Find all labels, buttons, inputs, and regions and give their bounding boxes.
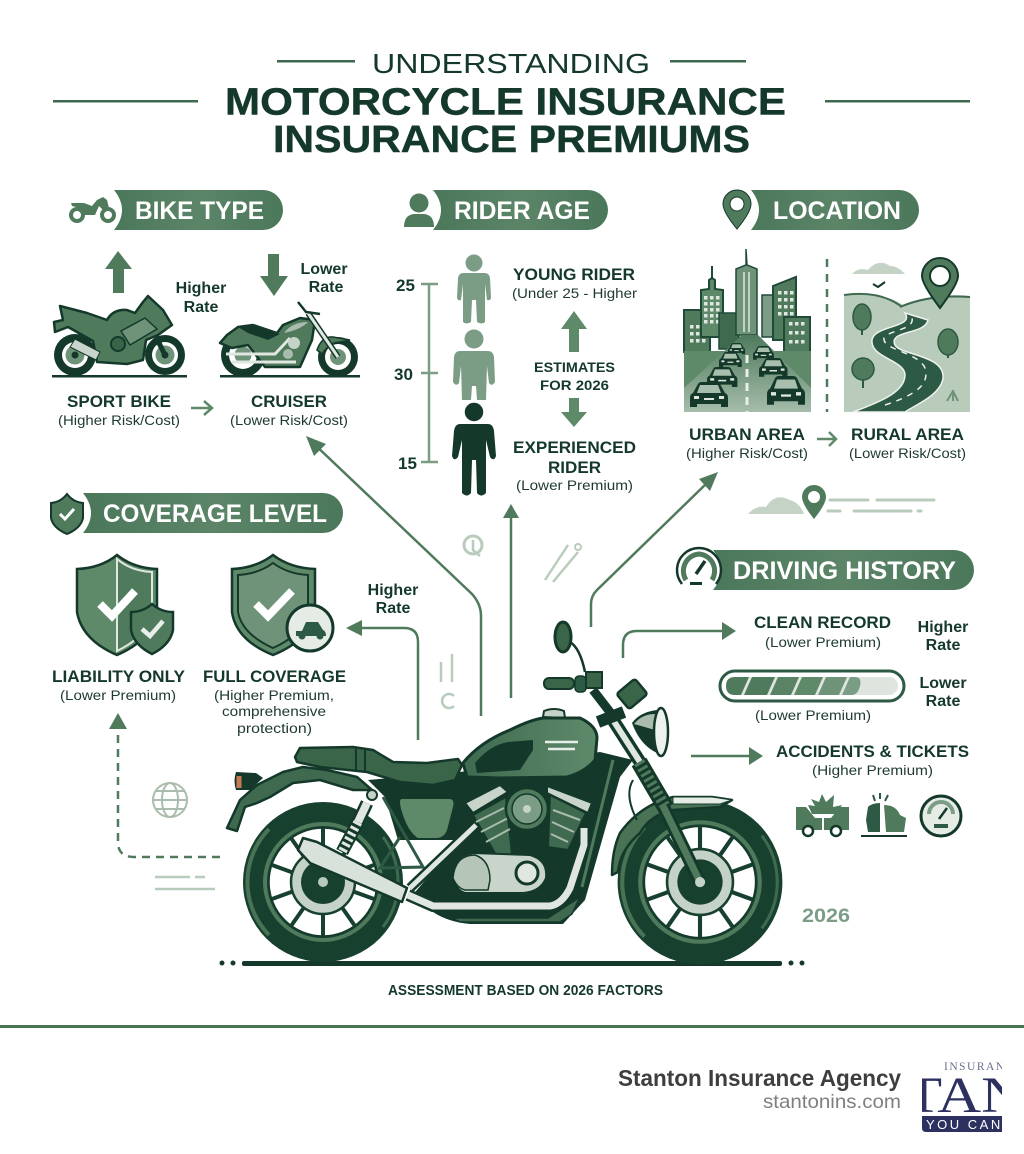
progress bar [720, 671, 904, 701]
front fork [598, 712, 705, 887]
icon: sport bike [52, 296, 187, 378]
decorative small marks [155, 536, 581, 889]
label: liability only: (Lower Premium) [60, 687, 176, 703]
panel: bike type [52, 190, 360, 428]
footer: logo: INSURANCE [944, 1061, 1023, 1073]
engine [453, 785, 592, 893]
label: clean record: CLEAN RECORD [754, 613, 891, 632]
headlight [632, 708, 668, 756]
label: sport bike: (Higher Risk/Cost) [58, 412, 180, 428]
panel: coverage level [51, 493, 418, 736]
heading: driving history [713, 550, 974, 590]
rear shock [342, 790, 377, 852]
heading: coverage level [83, 493, 343, 533]
label: higher rate: Higher [176, 280, 226, 297]
icon: small shield [51, 494, 83, 534]
title [53, 48, 970, 161]
brake cable [629, 780, 637, 820]
label: cruiser: (Lower Risk/Cost) [230, 412, 348, 428]
icon: speedometer [677, 548, 721, 585]
icon: map pin [723, 190, 751, 229]
label: clean record: (Lower Premium) [765, 634, 881, 650]
label: sport bike [58, 392, 180, 428]
footer: logo: TAN [905, 1068, 1024, 1124]
frame [368, 752, 633, 924]
icon: globe [153, 783, 187, 817]
label: lower rate: Lower [300, 261, 348, 278]
label: full coverage [203, 667, 346, 736]
frame rail [582, 760, 613, 887]
label: cruiser: CRUISER [251, 392, 327, 411]
age scale: 25 [396, 276, 415, 295]
label: young rider [512, 265, 637, 301]
title: INSURANCE PREMIUMS [273, 119, 750, 161]
label: liability only: LIABILITY ONLY [52, 667, 186, 686]
panel: location [684, 190, 970, 519]
label: lower rate: Lower [919, 675, 967, 692]
arrow: bike to location [591, 472, 718, 627]
age scale: 30 [394, 365, 413, 384]
label: higher rate: Rate [376, 600, 410, 617]
fuel tank [463, 709, 597, 778]
label: full coverage: (Higher Premium, [214, 687, 334, 703]
icon: crash [796, 794, 849, 836]
arrow: age up [561, 311, 587, 352]
icon: small motorcycle [71, 197, 114, 221]
arrow: bike to driving history [623, 622, 736, 658]
heading: rider age: RIDER AGE [454, 197, 590, 225]
label: higher rate: Rate [926, 637, 960, 654]
rear fender [227, 767, 372, 831]
heading: location: LOCATION [773, 197, 901, 225]
side cover [400, 799, 454, 838]
icon: full coverage shield [232, 555, 333, 655]
tail light [234, 772, 263, 790]
label: urban area: URBAN AREA [689, 425, 805, 444]
illustration: urban area [684, 249, 811, 412]
arrow: down lower rate [260, 254, 288, 296]
label: urban area: (Higher Risk/Cost) [686, 445, 808, 461]
heading: location [751, 190, 919, 230]
heading: bike type: BIKE TYPE [135, 197, 264, 225]
front wheel [618, 800, 782, 964]
exhaust pipes [408, 825, 584, 906]
label: young rider: (Under 25 - Higher [512, 285, 637, 301]
label: accidents and tickets: (Higher Premium) [812, 762, 933, 778]
label: lower premium: (Lower Premium) [755, 707, 871, 723]
label: estimates: FOR 2026 [540, 377, 609, 393]
label: experienced rider: EXPERIENCED [513, 438, 636, 457]
label: experienced rider: (Lower Premium) [516, 477, 633, 493]
label: higher rate: Higher [918, 619, 968, 636]
age scale [394, 276, 438, 473]
label: clean record [754, 613, 891, 650]
label: lower rate: Rate [309, 279, 343, 296]
label: experienced rider: RIDER [548, 458, 601, 477]
arrow: age down [561, 398, 587, 427]
gauge and handlebar [544, 672, 648, 716]
arrow: sport to cruiser [191, 401, 212, 415]
label: higher rate: Higher [368, 582, 418, 599]
footer [0, 1025, 1024, 1132]
heading: coverage level: COVERAGE LEVEL [103, 500, 327, 528]
caption: assessment: ASSESSMENT BASED ON 2026 FACTORS [388, 983, 663, 999]
arrow: bike to rider age [503, 504, 519, 698]
icon: speedometer circle [921, 796, 961, 836]
icon: decorative pin and cloud [748, 485, 934, 519]
label: young rider: YOUNG RIDER [513, 265, 635, 284]
icon: person [404, 194, 434, 227]
label: full coverage: FULL COVERAGE [203, 667, 346, 686]
footer: logo: YOU CAN [926, 1117, 1003, 1132]
icon: liability shield [77, 555, 173, 655]
arrow: bike to bike type [306, 436, 481, 716]
muffler [298, 838, 407, 902]
label: accidents and tickets: ACCIDENTS & TICKETS [776, 742, 969, 761]
footer: agency name: stantonins.com [763, 1091, 901, 1113]
arrow: urban to rural [817, 432, 836, 446]
icon: skid car [861, 793, 907, 837]
label: rural area: RURAL AREA [851, 425, 964, 444]
panel: rider age [394, 190, 637, 496]
heading: driving history: DRIVING HISTORY [733, 557, 956, 585]
arrow: bike to coverage [346, 620, 418, 740]
label: full coverage: comprehensive [222, 703, 326, 719]
front fender [612, 797, 732, 875]
title: UNDERSTANDING [372, 48, 650, 79]
label: higher rate: Rate [184, 299, 218, 316]
label: experienced rider [513, 438, 636, 493]
heading: bike type [114, 190, 283, 230]
footer: agency name [618, 1065, 901, 1113]
label: 2026: 2026 [802, 906, 850, 927]
arrow: up higher rate [105, 251, 132, 293]
mirror [555, 622, 585, 672]
label: rural area [849, 425, 966, 461]
icon: cruiser [220, 302, 360, 378]
icon: experienced rider figure [452, 402, 496, 496]
divider: urban and rural [826, 259, 828, 412]
label: estimates [534, 359, 615, 393]
label: estimates: ESTIMATES [534, 359, 615, 375]
seat [295, 747, 462, 785]
illustration: rural area [844, 258, 970, 412]
label: sport bike: SPORT BIKE [67, 392, 171, 411]
rear wheel [243, 802, 403, 962]
label: cruiser [230, 392, 348, 428]
arrow: bike to accidents [691, 747, 763, 765]
arrow: dashed to liability [109, 713, 220, 857]
age scale: 15 [398, 454, 417, 473]
belly pan [440, 897, 580, 922]
icon: adult figure [453, 330, 495, 400]
label: liability only [52, 667, 186, 703]
heading: rider age [433, 190, 608, 230]
label: lower rate: Rate [926, 693, 960, 710]
footer: agency name: Stanton Insurance Agency [618, 1065, 901, 1091]
rear struts [380, 797, 423, 868]
title: MOTORCYCLE INSURANCE [225, 82, 786, 124]
label: full coverage: protection) [237, 720, 312, 736]
label: accidents and tickets [776, 742, 969, 778]
illustration: main motorcycle [220, 622, 804, 966]
footer: logo [922, 1062, 1002, 1132]
icon: young rider figure [457, 254, 491, 324]
label: rural area: (Lower Risk/Cost) [849, 445, 966, 461]
ground line [220, 960, 804, 966]
panel: driving history [677, 548, 974, 837]
label: urban area [686, 425, 808, 461]
